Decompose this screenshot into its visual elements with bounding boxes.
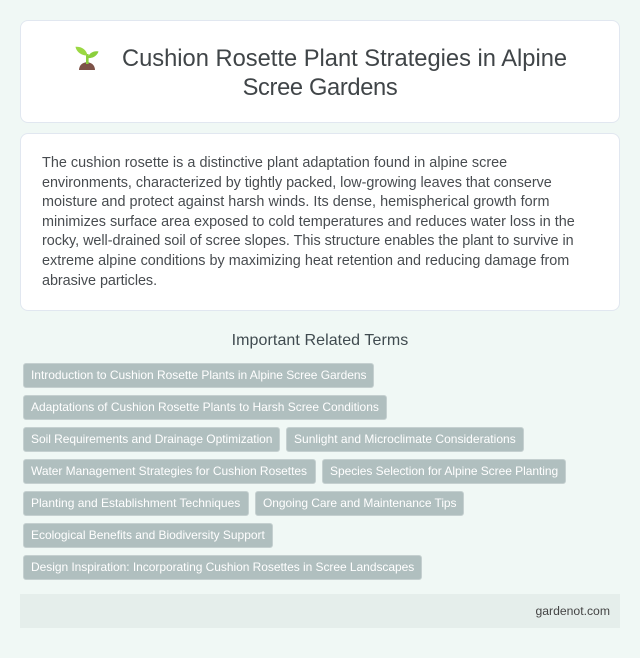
tag: Water Management Strategies for Cushion Rosettes [31,464,307,478]
text: description paragraph: environments, characterized by tightly packed, low-growing leaves that conserve [42,175,552,191]
tag [23,427,280,452]
tag: Design Inspiration: Incorporating Cushion Rosettes in Scree Landscapes [31,560,414,574]
text: description paragraph: abrasive particles. [42,273,157,289]
heading: title: Cushion Rosette Plant Strategies in Alpine [122,46,567,72]
tag [23,363,374,388]
footer text: source: gardenot.com [535,604,610,618]
icon: seedling [76,46,98,70]
heading: title: Scree Gardens [243,75,397,101]
tag: Species Selection for Alpine Scree Planting [330,464,558,478]
tag [23,491,249,516]
tag [23,459,316,484]
text: description paragraph [42,155,575,289]
heading: title [122,46,567,101]
tag: Introduction to Cushion Rosette Plants in Alpine Scree Gardens [31,368,366,382]
text: description paragraph: minimizes surface area exposed to cold temperatures and reduces water loss in the [42,214,575,230]
tag [322,459,566,484]
text: description paragraph: moisture and protect against harsh winds. Its dense, hemispherical growth form [42,194,549,210]
tag list [23,363,566,580]
tag: Ongoing Care and Maintenance Tips [263,496,456,510]
tag [23,523,273,548]
tag: Soil Requirements and Drainage Optimization [31,432,272,446]
tag: Adaptations of Cushion Rosette Plants to Harsh Scree Conditions [31,400,379,414]
heading: related terms: Important Related Terms [232,332,408,349]
tag [255,491,464,516]
tag: Ecological Benefits and Biodiversity Support [31,528,265,542]
text: description paragraph: The cushion rosette is a distinctive plant adaptation found in alpine scree [42,155,507,171]
footer bar [20,594,620,628]
text: description paragraph: rocky, well-drained soil of scree slopes. This structure enables the plant to survive in [42,233,574,249]
panel: description [20,133,620,311]
tag: Sunlight and Microclimate Considerations [294,432,516,446]
tag [286,427,524,452]
text: description paragraph: extreme alpine conditions by maximizing heat retention and reducing damage from [42,253,569,269]
tag [23,555,422,580]
tag: Planting and Establishment Techniques [31,496,240,510]
tag [23,395,387,420]
panel: title card [20,20,620,123]
